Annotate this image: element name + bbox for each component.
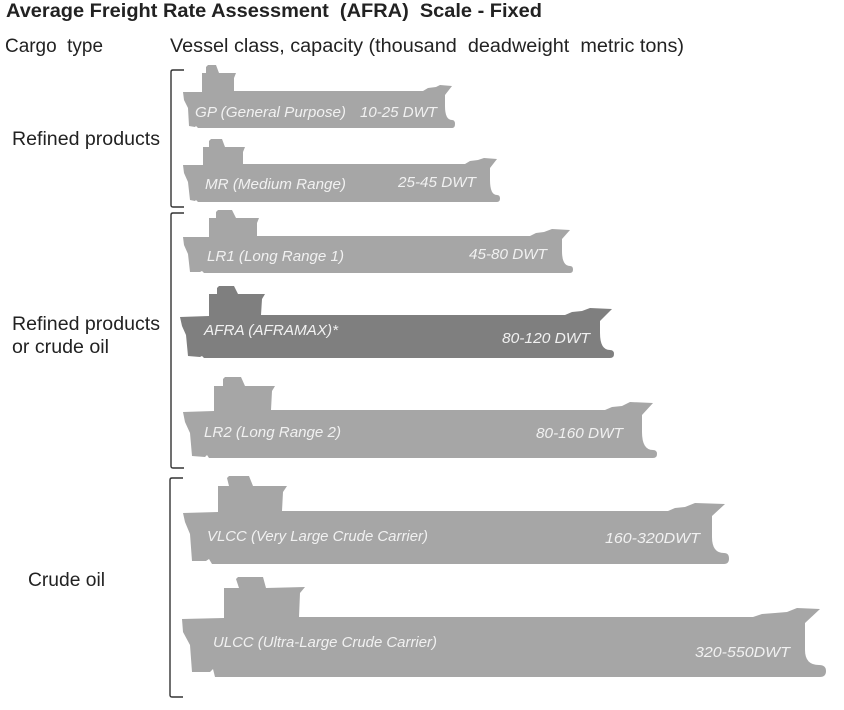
ship: LR2: LR2 (Long Range 2): [204, 424, 341, 441]
ship: GP: 10-25 DWT: [360, 104, 439, 121]
column heading: vessel class: Vessel class, capacity (thousand deadweight metric tons): [170, 36, 684, 57]
ship: GP: [183, 65, 455, 128]
ship: ULCC: [182, 577, 826, 677]
cargo label: crude oil: Crude oil: [28, 570, 105, 591]
ship: LR1: [183, 210, 573, 273]
ship: VLCC: 160-320DWT: [605, 530, 702, 547]
ship: MR: [183, 139, 500, 202]
bracket: refined products: [171, 70, 184, 207]
cargo label: refined products or crude oil: [12, 314, 160, 358]
ship: ULCC: 320-550DWT: [695, 644, 792, 661]
title: Average Freight Rate Assessment (AFRA) Scale - Fixed: [6, 1, 542, 22]
bracket: crude oil: [170, 478, 183, 697]
ship: GP: GP (General Purpose): [195, 104, 346, 121]
ship: LR1: LR1 (Long Range 1): [207, 248, 344, 265]
ship: VLCC: [183, 476, 729, 564]
ship: AFRA (highlighted): AFRA (AFRAMAX)*: [203, 322, 339, 339]
ship: AFRA (highlighted): [180, 286, 614, 358]
bracket: refined products or crude oil: [171, 213, 184, 468]
ship: MR: 25-45 DWT: [397, 174, 478, 191]
column heading: cargo type: Cargo type: [5, 36, 103, 57]
ship: ULCC: ULCC (Ultra-Large Crude Carrier): [213, 634, 437, 651]
ship: LR2: 80-160 DWT: [536, 425, 625, 442]
ship: VLCC: VLCC (Very Large Crude Carrier): [207, 528, 428, 545]
ship: AFRA (highlighted): 80-120 DWT: [502, 330, 592, 347]
ship: LR2: [183, 377, 657, 458]
cargo label: refined products or crude oil: Refined products: [12, 314, 160, 335]
ship: MR: MR (Medium Range): [205, 176, 346, 193]
cargo label: refined products or crude oil: or crude oil: [12, 337, 109, 358]
cargo label: refined products: Refined products: [12, 129, 160, 150]
ship: LR1: 45-80 DWT: [469, 246, 549, 263]
